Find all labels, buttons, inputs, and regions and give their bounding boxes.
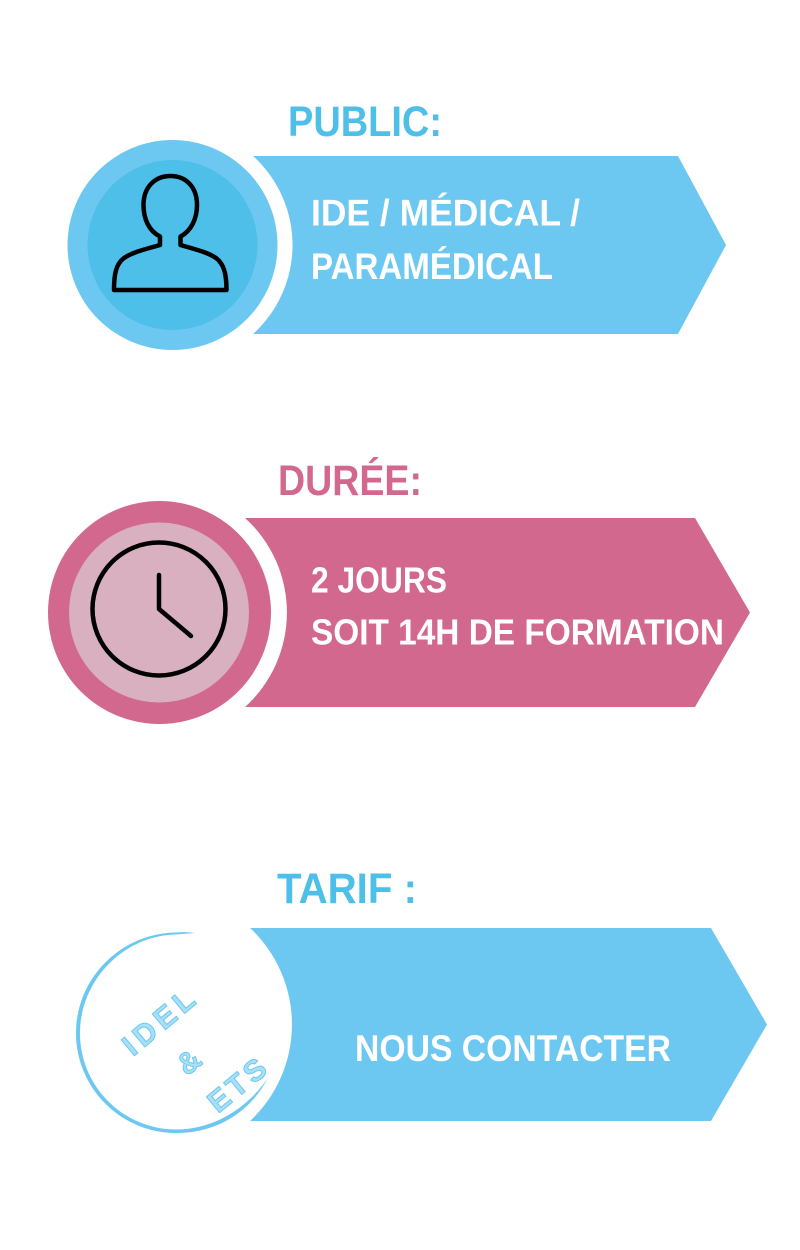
banner text: public: PARAMÉDICAL bbox=[311, 246, 553, 287]
heading: tarif: TARIF : bbox=[277, 865, 417, 913]
banner text: tarif: NOUS CONTACTER bbox=[355, 1028, 671, 1069]
badge: idel and ets: IDEL bbox=[116, 983, 202, 1062]
heading: public: PUBLIC: bbox=[288, 98, 442, 146]
banner text: duree: 2 JOURS bbox=[311, 560, 447, 600]
banner text: public: IDE / MÉDICAL / bbox=[311, 192, 580, 234]
arrow banner: tarif bbox=[250, 928, 767, 1121]
banner text: duree: SOIT 14H DE FORMATION bbox=[311, 612, 724, 652]
panel: tarif bbox=[76, 865, 767, 1133]
panel: duree bbox=[48, 457, 750, 724]
badge: idel and ets: ETS bbox=[201, 1052, 273, 1119]
badge: idel and ets bbox=[76, 932, 273, 1133]
arrow banner: public bbox=[253, 156, 726, 334]
arrow banner: duree bbox=[245, 518, 750, 707]
banner text: public bbox=[311, 192, 580, 287]
heading: duree: DURÉE: bbox=[278, 457, 422, 505]
panel: public bbox=[68, 98, 726, 350]
banner text: duree bbox=[311, 560, 724, 652]
icon: clock in circle bbox=[48, 501, 271, 724]
icon: person in circle bbox=[68, 140, 278, 350]
badge: idel and ets: & bbox=[171, 1043, 208, 1082]
